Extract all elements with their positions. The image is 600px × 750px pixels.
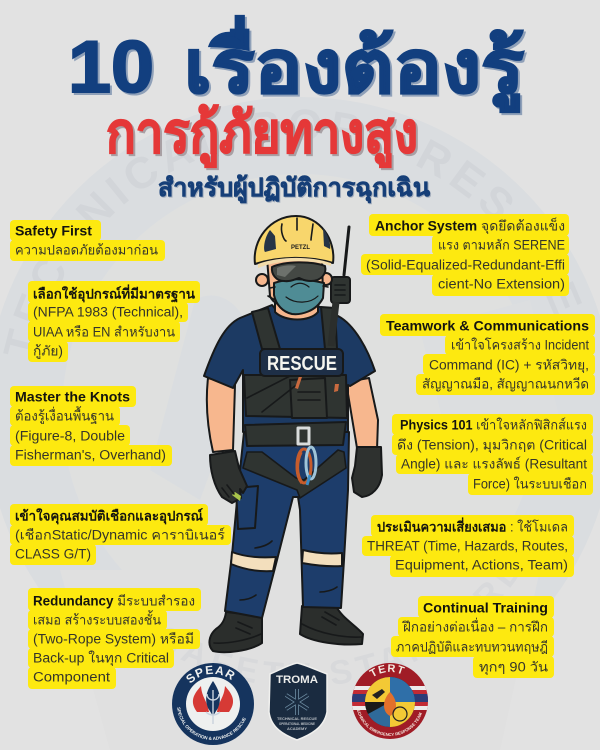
callout: Safety First: Safety First	[15, 224, 93, 238]
callout: Master the Knots: Fisherman's, Overhand)	[15, 448, 166, 462]
callout: standard equipment	[28, 281, 200, 362]
logo: SPEAR	[172, 663, 254, 745]
goggles	[272, 262, 325, 281]
logo: SPEAR: SPECIAL OPERATION & ADVANCE RESCUE	[177, 707, 246, 740]
logo: TERT: TERT	[368, 664, 405, 676]
background watermark emblem: TECHNICAL ROPE RESCUE	[0, 101, 593, 363]
callout: Physics 101: ดึง (Tension), มุมวิกฤต (Critical	[397, 438, 587, 454]
logo: TROMA: TECHNICAL RESCUE	[277, 716, 317, 721]
harness and chest rig	[243, 307, 347, 498]
rescue patch	[260, 349, 343, 376]
callout: risk assessment THREAT: Equipment, Actions, Team)	[395, 558, 568, 572]
arms	[207, 378, 378, 452]
face mask	[268, 279, 328, 314]
callout: Master the Knots: ต้องรู้เงื่อนพื้นฐาน	[15, 406, 114, 424]
callout: rope and equipment properties: เข้าใจคุณสมบัติเชือกและอุปกรณ์	[15, 508, 203, 524]
title: 10 เรื่องต้องรู้: เรื่องต้องรู้	[184, 15, 524, 113]
callout: Anchor System: แรง ตามหลัก SERENE	[438, 238, 565, 252]
reflective stripes	[231, 550, 342, 571]
callout: standard equipment: กู้ภัย)	[33, 344, 63, 360]
callout: Continual Training: ฝึกอย่างต่อเนื่อง – การฝึก	[401, 618, 548, 634]
callout: standard equipment: UIAA หรือ EN สำหรับงาน	[33, 324, 175, 340]
callout: Teamwork and Communications	[380, 314, 595, 395]
callout: Physics 101: Angle) และ แรงลัพธ์ (Resultant	[401, 456, 587, 472]
rescue patch: RESCUE	[267, 353, 337, 375]
callout: Master the Knots: (Figure-8, Double	[15, 428, 125, 444]
callout: risk assessment THREAT: THREAT (Time, Hazards, Routes,	[367, 538, 568, 554]
title: 10 เรื่องต้องรู้: 10	[68, 27, 154, 108]
callout: Redundancy: (Two-Rope System) หรือมี	[33, 632, 194, 646]
callout: Anchor System: Anchor System จุดยึดต้องแข็ง	[375, 216, 565, 234]
boots	[209, 606, 363, 652]
trousers	[225, 432, 349, 618]
radio	[331, 227, 350, 346]
head	[256, 258, 332, 308]
background watermark emblem: SAFETY STANDARD	[150, 547, 534, 695]
title: 10 เรื่องต้องรู้	[68, 15, 524, 113]
helmet: PETZL	[291, 244, 310, 251]
callout: Redundancy	[28, 588, 201, 689]
callout: Continual Training: ทุกๆ 90 วัน	[479, 660, 548, 676]
callout: Continual Training: ภาคปฏิบัติและทบทวนทฤษฎี	[396, 640, 548, 654]
logo: TROMA: TROMA	[276, 674, 318, 686]
callout: risk assessment THREAT	[362, 515, 574, 577]
callout: Anchor System: (Solid-Equalized-Redundant-Effi	[366, 258, 565, 272]
callout: Teamwork and Communications: เข้าใจโครงสร้าง Incident	[451, 336, 589, 352]
callout: rope and equipment properties: CLASS G/T)	[15, 546, 91, 562]
logo: TROMA: ACADEMY	[287, 727, 308, 731]
shirt	[204, 305, 375, 432]
callout: Teamwork and Communications: Command (IC) + รหัสวิทยุ,	[429, 358, 589, 374]
gloves	[210, 447, 382, 503]
logo: TROMA: OPERATIONAL MEDICINE	[279, 722, 316, 726]
callout: Anchor System	[361, 214, 569, 296]
subtitle: การกู้ภัยทางสูง: การกู้ภัยทางสูง	[106, 101, 418, 168]
neck	[275, 302, 318, 320]
callout: Physics 101	[392, 414, 593, 495]
callout: standard equipment: (NFPA 1983 (Technical),	[33, 304, 183, 320]
helmet	[255, 216, 333, 268]
callout: standard equipment: เลือกใช้อุปกรณ์ที่มีมาตรฐาน	[33, 284, 196, 304]
callout: Master the Knots	[10, 386, 172, 466]
callout: rope and equipment properties: (เชือกStatic/Dynamic คาราบิเนอร์	[15, 526, 225, 542]
callout: Anchor System: cient-No Extension)	[438, 276, 565, 292]
callout: Redundancy: Component	[33, 670, 110, 684]
callout: Redundancy: Back-up ในทุก Critical	[33, 650, 169, 666]
callout: Redundancy: เสมอ สร้างระบบสองชั้น	[33, 610, 161, 628]
logo: TERT: TECHNICAL EMERGENCY RESPONSE TEAM	[357, 708, 422, 736]
rescuer illustration	[204, 216, 382, 652]
callout: Redundancy: Redundancy มีระบบสำรอง	[33, 594, 195, 608]
callout: risk assessment THREAT: ประเมินความเสี่ยงเสมอ : ใช้โมเดล	[377, 516, 568, 534]
logo: TERT	[352, 663, 428, 739]
callout: Physics 101: Physics 101 เข้าใจหลักฟิสิกส์แรง	[400, 416, 587, 432]
callout: Safety First	[10, 220, 165, 261]
logo: TROMA	[269, 663, 327, 740]
callout: Master the Knots: Master the Knots	[15, 390, 130, 404]
callout: Teamwork and Communications: Teamwork & Communications	[386, 318, 589, 334]
callout: Physics 101: Force) ในระบบเชือก	[473, 476, 587, 492]
callout: Teamwork and Communications: สัญญาณมือ, สัญญาณนกหวีด	[422, 376, 589, 392]
callout: Safety First: ความปลอดภัยต้องมาก่อน	[15, 242, 158, 258]
callout: Continual Training	[391, 596, 554, 678]
tagline: สำหรับผู้ปฏิบัติการฉุกเฉิน	[158, 174, 430, 204]
callout: rope and equipment properties	[10, 504, 231, 565]
logo: SPEAR: SPEAR	[186, 666, 234, 683]
callout: Continual Training: Continual Training	[423, 600, 548, 616]
